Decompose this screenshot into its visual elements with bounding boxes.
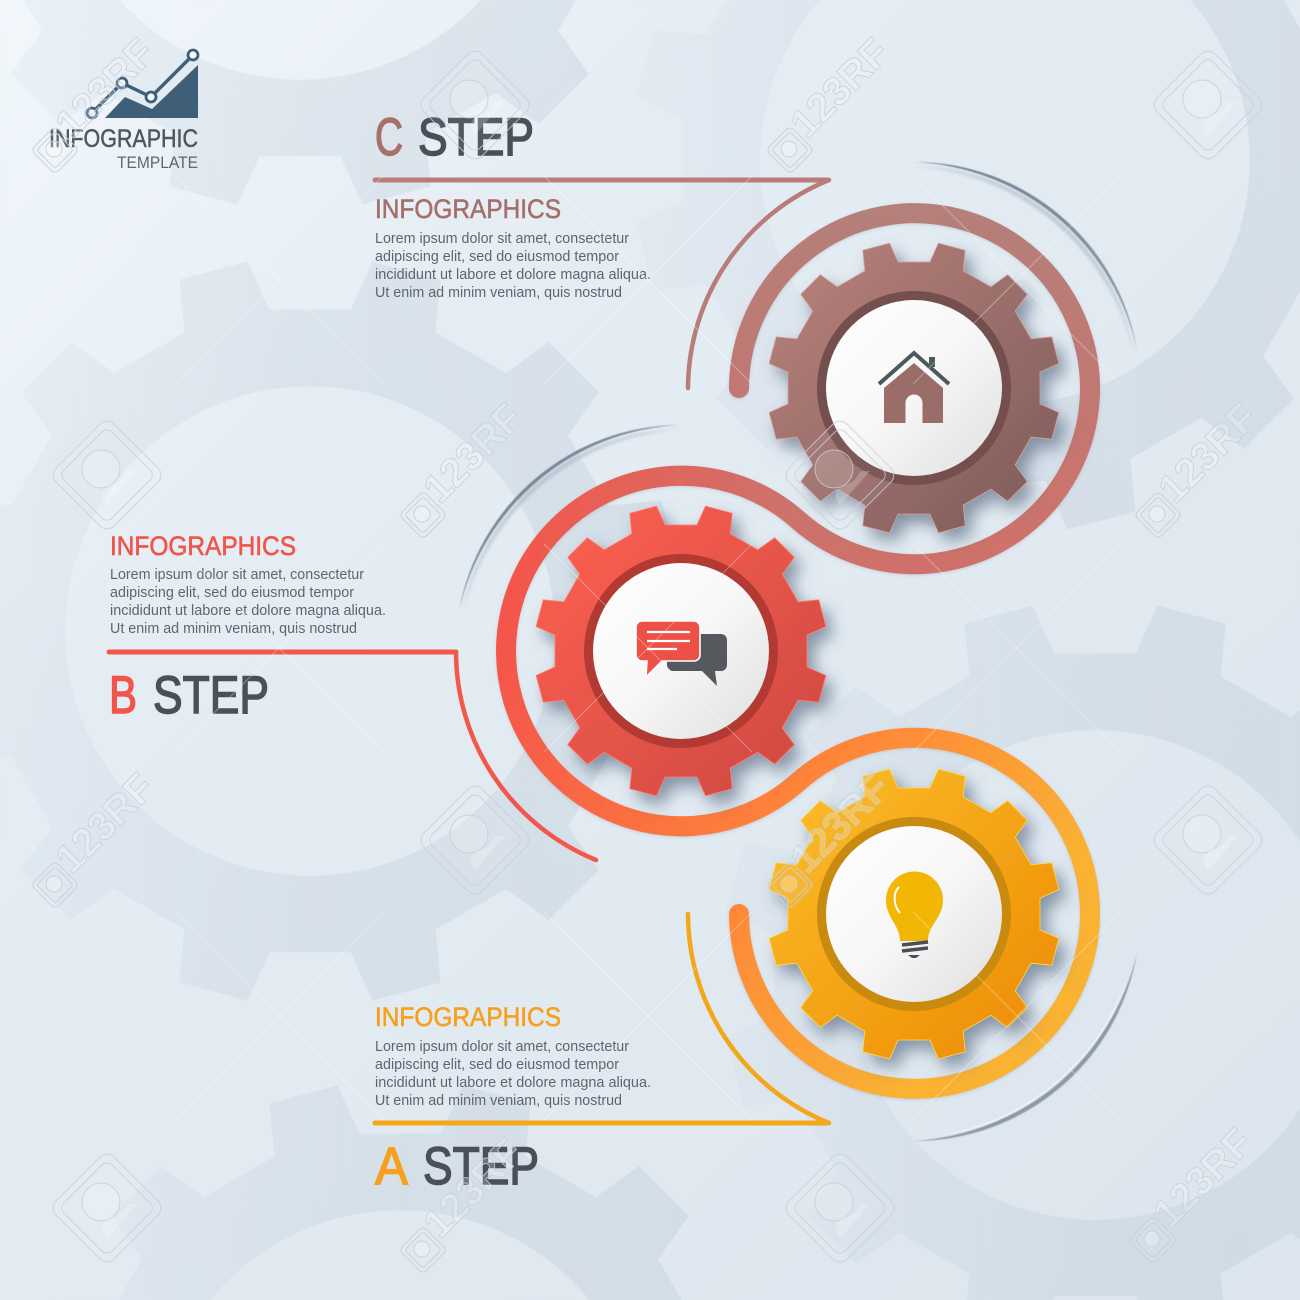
gear C body [769, 243, 1059, 533]
step A leader line [375, 914, 829, 1123]
step B text block: Ut enim ad minim veniam, quis nostrud [110, 621, 357, 637]
step B heading: B [109, 666, 137, 725]
step C text block: Ut enim ad minim veniam, quis nostrud [375, 285, 622, 301]
cut shadow arc: A [914, 953, 1137, 1141]
icon: house [879, 353, 949, 423]
step A heading: STEP [423, 1137, 539, 1196]
step A text block: INFOGRAPHICS [375, 1002, 561, 1032]
watermark 123RF marks: 123RF [47, 30, 163, 146]
logo subtitle: TEMPLATE [117, 153, 198, 172]
step C text block: adipiscing elit, sed do eiusmod tempor [375, 249, 619, 265]
step A text block: incididunt ut labore et dolore magna aliqua. [375, 1075, 651, 1091]
icon: chat bubbles [636, 621, 727, 686]
step A text block [375, 1002, 651, 1109]
cut shadow arc: B [459, 425, 683, 615]
watermark 123RF marks: 123RF [415, 395, 531, 511]
step A heading [375, 1137, 539, 1196]
gear B hub [593, 563, 769, 739]
step B heading: STEP [153, 666, 269, 725]
gear B with chat icon [536, 506, 826, 796]
watermark 123RF marks: 123RF [1145, 1120, 1261, 1236]
ribbon: A ring [739, 738, 1090, 1089]
ribbon: B ring lower [506, 651, 798, 826]
step C text block: Lorem ipsum dolor sit amet, consectetur [375, 231, 629, 247]
step C heading: C [375, 108, 403, 167]
gear C hub ring [817, 291, 1011, 485]
cut shadow arc: C [911, 162, 1137, 354]
icon: light bulb [886, 872, 943, 958]
gear A hub [826, 826, 1002, 1002]
step B text block: INFOGRAPHICS [110, 531, 296, 561]
watermark 123RF marks: 123RF [1150, 395, 1266, 511]
watermark 123RF marks: 123RF [415, 1130, 531, 1246]
gear A hub ring [817, 817, 1011, 1011]
logo wordmark: INFOGRAPHIC [49, 125, 198, 153]
step C leader line [375, 180, 829, 388]
step C heading [375, 108, 534, 167]
watermark 123RF marks: 123RF [782, 30, 898, 146]
step B text block: Lorem ipsum dolor sit amet, consectetur [110, 567, 364, 583]
step B text block [110, 531, 386, 637]
watermark 123RF marks: 123RF [782, 765, 898, 881]
gear B body [536, 506, 826, 796]
step C text block: incididunt ut labore et dolore magna aliqua. [375, 267, 651, 283]
ribbon: C ring [739, 213, 1090, 564]
gear A with bulb icon [769, 769, 1059, 1059]
gear A body [769, 769, 1059, 1059]
gear B hub ring [584, 554, 778, 748]
step C heading: STEP [418, 108, 534, 167]
step C text block [375, 194, 651, 301]
step C text block: INFOGRAPHICS [375, 194, 561, 224]
watermark 123RF marks: 123RF [47, 765, 163, 881]
step A text block: adipiscing elit, sed do eiusmod tempor [375, 1057, 619, 1073]
connector ribbon [506, 213, 1090, 1089]
logo: infographic template [49, 50, 198, 172]
step A text block: Ut enim ad minim veniam, quis nostrud [375, 1093, 622, 1109]
watermark cross lines [175, 176, 1121, 1120]
step A heading: A [375, 1137, 409, 1196]
step B text block: incididunt ut labore et dolore magna aliqua. [110, 603, 386, 619]
step A text block: Lorem ipsum dolor sit amet, consectetur [375, 1039, 629, 1055]
step B heading [109, 666, 269, 725]
step B text block: adipiscing elit, sed do eiusmod tempor [110, 585, 354, 601]
gear C hub [826, 300, 1002, 476]
ribbon: B ring upper [506, 476, 798, 651]
step B leader line [109, 652, 596, 860]
gear C with home icon [769, 243, 1059, 533]
logo chart icon [87, 50, 198, 118]
